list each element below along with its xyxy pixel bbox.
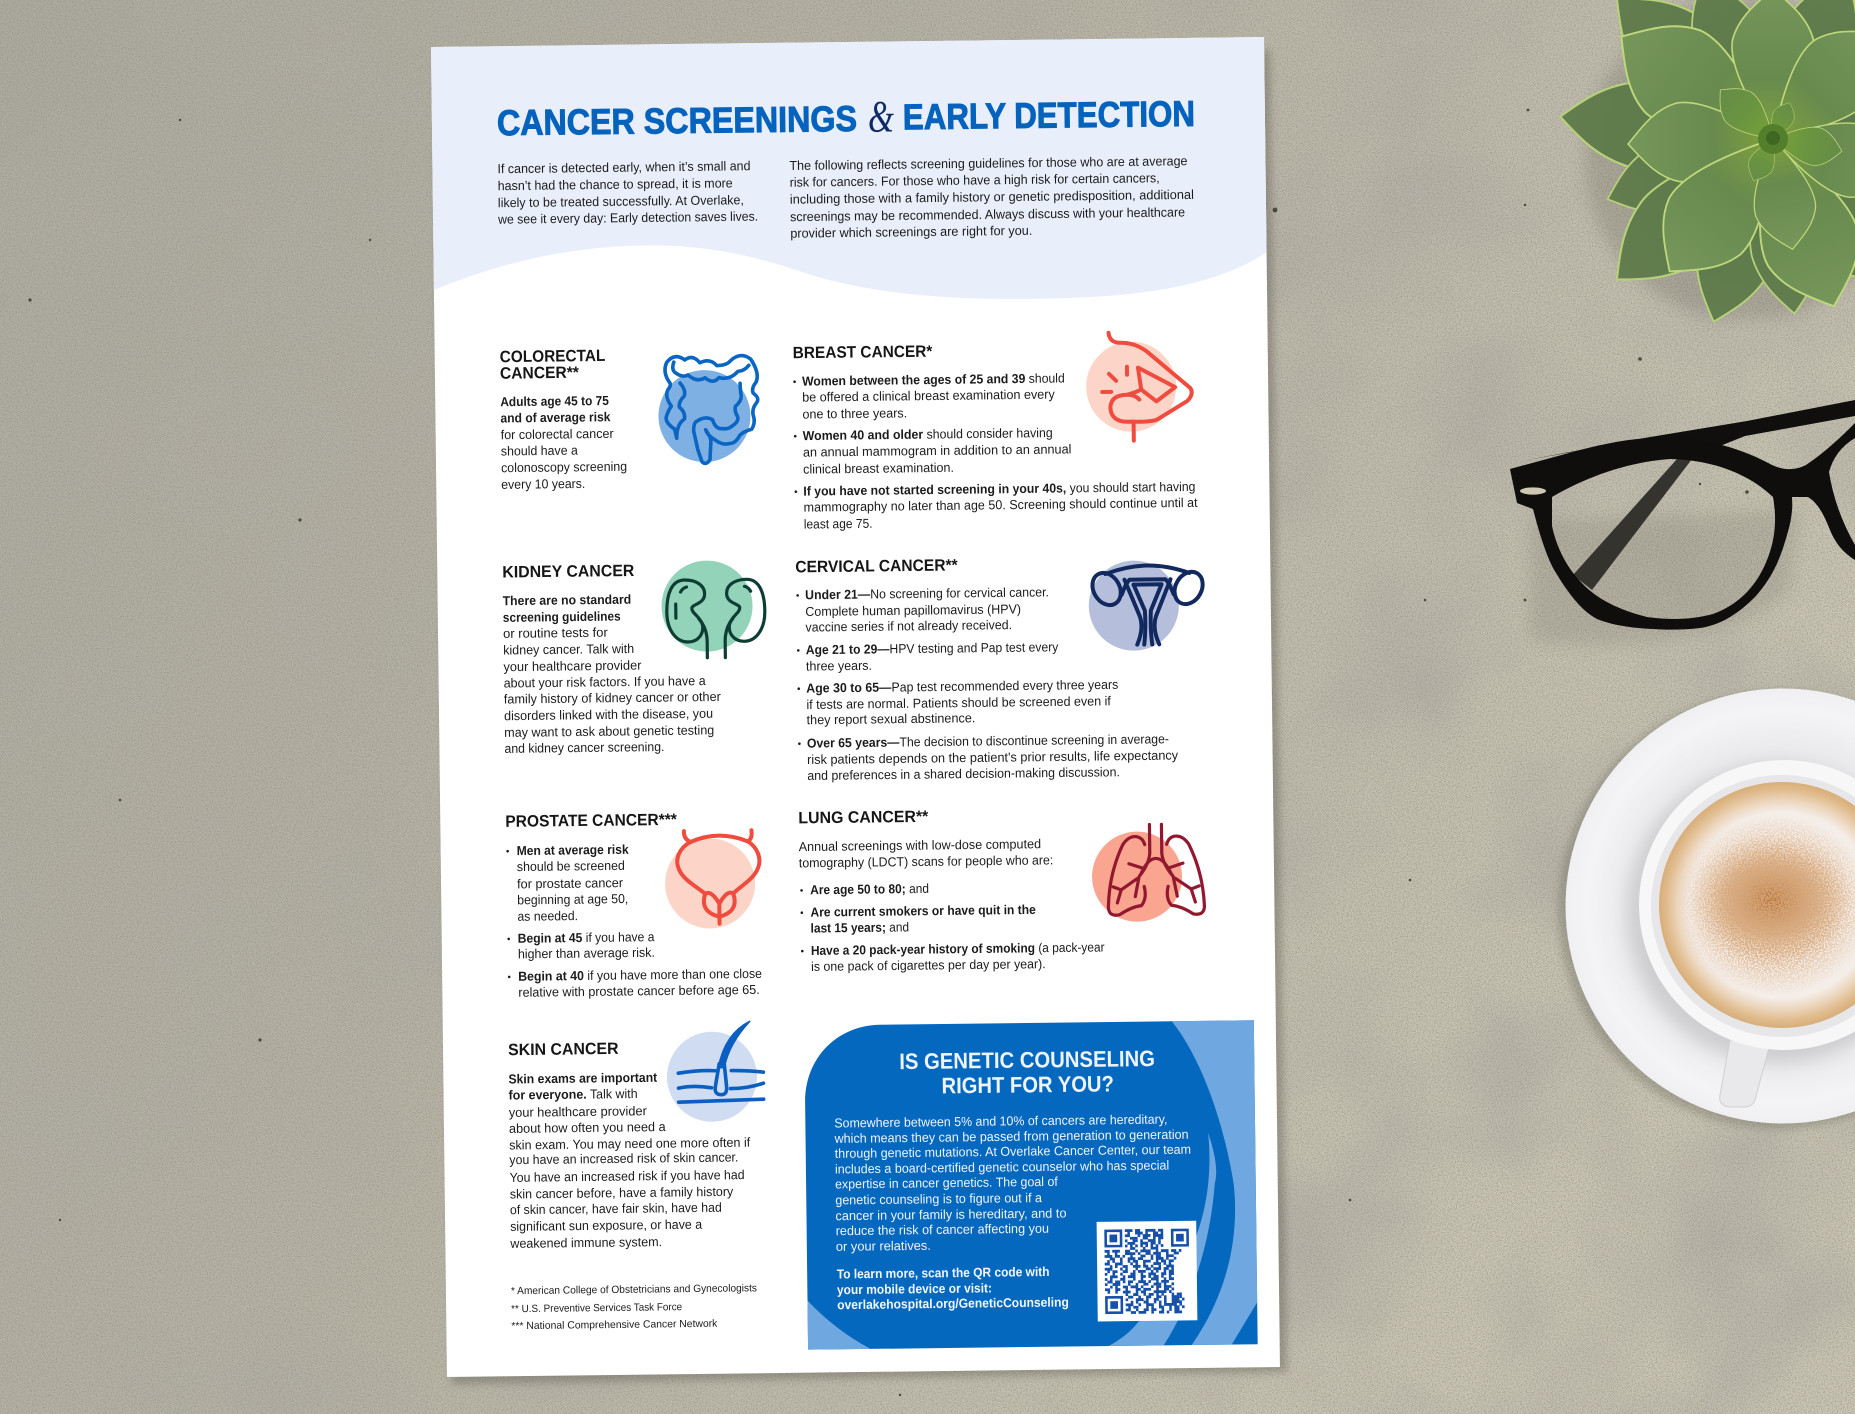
title: EARLY DETECTION [903,93,1195,137]
icon: skin and hair follicle [666,1021,764,1122]
bullet list: if tests are normal. Patients should be screened even if [806,693,1111,712]
sheet shadow [436,50,1287,1384]
bullet list: beginning at age 50, [517,891,628,907]
bullet list: vaccine series if not already received. [805,617,1012,635]
text block: should have a [501,443,579,459]
panel: cervical cancer [795,553,1211,783]
icon: coffee with foam [1659,782,1855,1028]
icon: far temple arm [1573,459,1692,590]
heading: SKIN CANCER [508,1040,619,1059]
icon: cup [1639,760,1855,1050]
succulent plant [1556,0,1855,334]
callout call to action [837,1264,1069,1312]
bullet list [796,583,1179,783]
panel: genetic counseling callout [804,1020,1258,1350]
bullet list: least age 75. [804,516,873,532]
icon: cinnamon [1677,815,1855,995]
bullet list: risk patients depends on the patient's prior results, life expectancy [807,748,1179,767]
callout call to action: your mobile device or visit: [837,1280,992,1297]
icon: top temple arm [1522,400,1855,461]
text block: you have an increased risk of skin cancer. [509,1149,738,1167]
intro left text: likely to be treated successfully. At Overlake, [498,192,744,210]
intro text: Annual screenings with low-dose computed [799,836,1041,854]
text block: screening guidelines [503,609,621,625]
icon: uterus [1087,560,1209,651]
bullet list: last 15 years; and [811,919,909,936]
intro left text: hasn’t had the chance to spread, it is more [498,175,733,193]
callout body: or your relatives. [836,1238,931,1254]
icon: prostate [664,830,760,929]
title: CANCER SCREENINGS [497,98,857,143]
panel: header [431,37,1267,306]
callout body [833,1111,1192,1254]
poster sheet [431,37,1280,1377]
bullet list: as needed. [517,908,578,924]
text block: or routine tests for [503,625,608,641]
icon: kidneys [661,560,765,658]
intro left text: we see it every day: Early detection saves lives. [497,209,758,227]
callout background [804,1020,1258,1350]
footnotes: ** U.S. Preventive Services Task Force [511,1301,682,1315]
heading: BREAST CANCER* [793,343,933,362]
footnotes: * American College of Obstetricians and Gynecologists [511,1282,757,1297]
intro text: tomography (LDCT) scans for people who are: [799,852,1053,870]
bullet list: Age 21 to 29—HPV testing and Pap test every [806,639,1059,657]
callout body: genetic counseling is to figure out if a [835,1190,1043,1208]
heading: COLORECTAL [500,347,605,366]
text block: weakened immune system. [509,1234,662,1251]
text block: every 10 years. [501,476,585,492]
text block: There are no standard [503,592,631,608]
panel: lung cancer [798,805,1205,974]
panel: kidney cancer [502,560,767,756]
icon: hinge pin [1520,487,1546,495]
text block: and of average risk [500,409,611,426]
light curved band: upper right [1172,1020,1258,1345]
intro left text: If cancer is detected early, when it’s small and [497,158,751,176]
bullet list: If you have not started screening in your 40s, you should start having [803,479,1195,499]
callout body: expertise in cancer genetics. The goal of [835,1174,1058,1192]
intro right text: including those with a family history or genetic predisposition, additional [790,187,1194,207]
bullet list: and preferences in a shared decision-making discussion. [807,764,1120,783]
text block: significant sun exposure, or have a [510,1217,703,1234]
callout body: reduce the risk of cancer affecting you [836,1221,1049,1238]
header wave background [431,37,1267,306]
bullet list: be offered a clinical breast examination every [802,387,1055,405]
title [497,88,1195,146]
icon: frame and lenses [1510,423,1855,630]
callout heading: RIGHT FOR YOU? [941,1071,1114,1098]
text block: and kidney cancer screening. [504,739,665,756]
bullet list [800,879,1105,974]
footnotes [511,1282,757,1332]
bullet list: an annual mammogram in addition to an annual [803,441,1072,460]
bullet list: Age 30 to 65—Pap test recommended every three years [806,677,1119,696]
footnotes: *** National Comprehensive Cancer Network [511,1318,718,1332]
icon: breast [1086,332,1192,441]
icon: saucer [1566,688,1855,1124]
bullet list: three years. [806,658,872,674]
text block: of skin cancer, have fair skin, have had [510,1200,722,1217]
text block: for colorectal cancer [501,426,614,442]
text block: Skin exams are important [508,1070,658,1087]
bullet list [506,840,762,1000]
bullet list: should be screened [517,858,625,874]
heading: CERVICAL CANCER** [795,556,958,576]
bullet list: Are current smokers or have quit in the [810,902,1036,920]
text block: your healthcare provider [509,1103,648,1120]
bullet list: Under 21—No screening for cervical cancer. [805,584,1049,602]
callout body: includes a board-certified genetic counselor who has special [835,1158,1169,1177]
text block: skin cancer before, have a family history [510,1184,734,1202]
text block [507,1069,752,1251]
text block: disorders linked with the disease, you [504,706,713,723]
intro right text: screenings may be recommended. Always discuss with your healthcare [790,204,1185,224]
intro text [799,836,1053,870]
bullet list: relative with prostate cancer before age 65. [518,982,760,1000]
text block [503,591,722,756]
bullet list: Are age 50 to 80; and [810,881,929,897]
heading: PROSTATE CANCER*** [505,811,678,831]
text block: Adults age 45 to 75 [500,393,609,409]
eyeglasses [1510,400,1855,645]
intro right text [789,153,1194,241]
heading: KIDNEY CANCER [502,562,634,582]
panel: skin cancer [507,1021,765,1251]
text block: You have an increased risk if you have had [509,1167,745,1185]
intro right text: provider which screenings are right for you. [790,223,1032,241]
bullet list: Women 40 and older should consider having [803,425,1053,443]
bullet list: one to three years. [802,405,907,422]
bullet list: Complete human papillomavirus (HPV) [805,601,1021,619]
bullet list: clinical breast examination. [803,460,954,477]
bullet list: Have a 20 pack-year history of smoking (a pack-year [811,939,1105,958]
heading: LUNG CANCER** [798,808,929,827]
callout body: through genetic mutations. At Overlake Cancer Center, our team [835,1142,1191,1161]
bullet list [793,369,1198,532]
bullet list: Begin at 40 if you have more than one close [518,966,762,984]
intro right text: risk for cancers. For those who have a high risk for certain cancers, [790,170,1160,190]
callout heading: IS GENETIC COUNSELING [899,1046,1155,1074]
heading: CANCER** [500,364,580,383]
heading [500,347,606,383]
bullet list: they report sexual abstinence. [807,710,975,727]
panel: prostate cancer [505,810,762,1000]
callout body: Somewhere between 5% and 10% of cancers are hereditary, [834,1112,1167,1131]
text block: about your risk factors. If you have a [504,673,706,691]
bullet list: higher than average risk. [518,945,655,961]
text block: for everyone. Talk with [508,1086,638,1103]
panel: breast cancer [793,332,1198,532]
icon: lungs [1091,824,1205,922]
bullet list: is one pack of cigarettes per day per year). [811,956,1046,974]
bullet list: Begin at 45 if you have a [518,929,655,946]
text block: skin exam. You may need one more often if [509,1135,751,1153]
intro right text: The following reflects screening guidelines for those who are at average [789,153,1188,173]
light curved band: crescent [1106,1133,1218,1346]
callout heading [899,1046,1155,1099]
callout call to action: To learn more, scan the QR code with [837,1264,1050,1282]
callout body: cancer in your family is hereditary, and to [835,1205,1067,1223]
text block: colonoscopy screening [501,459,627,475]
icon: cup handle [1720,1040,1771,1107]
text block: may want to ask about genetic testing [504,722,714,740]
bullet list: Over 65 years—The decision to discontinue screening in average- [807,731,1169,751]
bullet list: for prostate cancer [517,875,624,891]
bullet list: mammography no later than age 50. Screening should continue until at [803,495,1198,515]
callout call to action: overlakehospital.org/GeneticCounseling [837,1294,1069,1312]
text block: kidney cancer. Talk with [503,641,634,658]
text block: family history of kidney cancer or other [504,689,722,707]
intro left text [496,158,758,227]
title: & [868,91,894,142]
bullet list: Women between the ages of 25 and 39 should [802,370,1065,389]
coffee cup on saucer [1558,688,1855,1129]
text block [500,393,627,492]
icon: QR code [1097,1221,1197,1321]
icon: colon [658,355,758,464]
light corner: bottom left [807,1300,871,1350]
text block: your healthcare provider [503,658,642,674]
panel: colorectal cancer [500,345,759,492]
text block: about how often you need a [509,1119,666,1136]
callout body: which means they can be passed from generation to generation [833,1127,1189,1146]
bullet list: Men at average risk [517,842,629,858]
